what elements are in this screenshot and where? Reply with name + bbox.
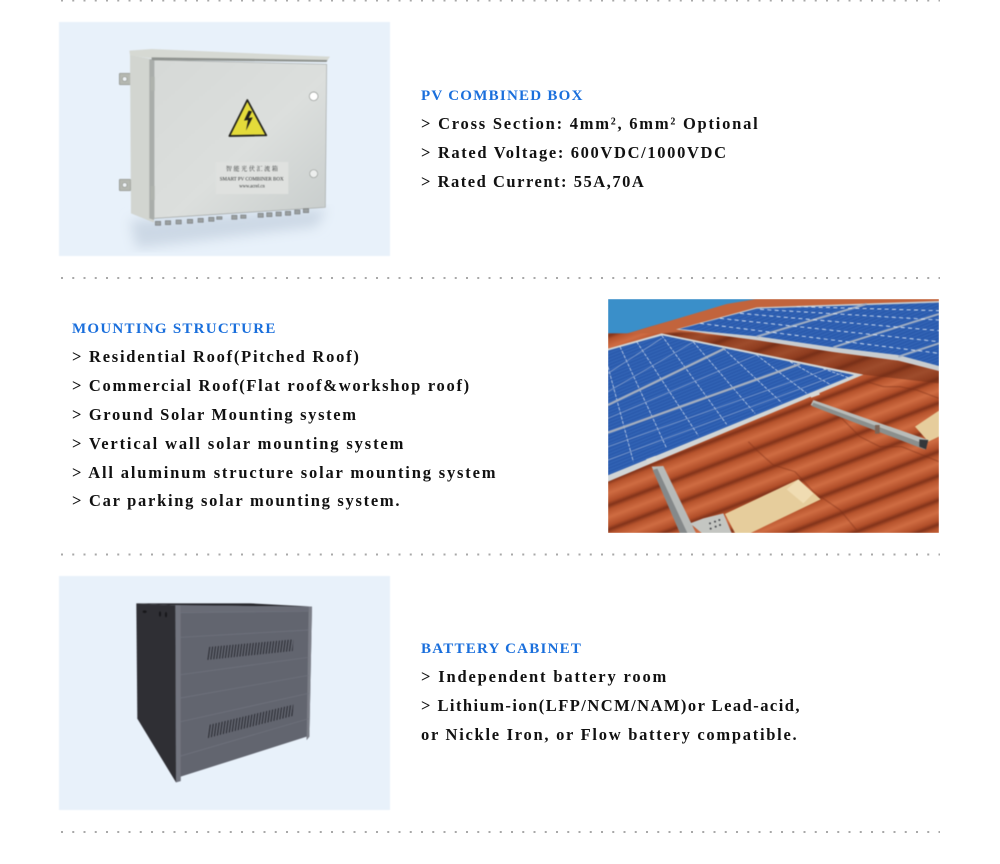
lower solar panel — [608, 332, 864, 482]
icon: mounting ears — [119, 73, 131, 191]
spec: rated voltage: > Rated Voltage: 600VDC/1000VDC — [421, 143, 728, 162]
tile joints — [748, 382, 939, 530]
item: residential roof: > Residential Roof(Pitched Roof) — [72, 347, 361, 366]
text block: battery cabinet — [421, 641, 801, 744]
side holes — [143, 610, 167, 617]
panel: battery cabinet photo — [59, 576, 390, 810]
wood battens — [725, 479, 821, 533]
label plate: www.acrel.cn — [239, 184, 265, 189]
mounting rail: left — [652, 466, 732, 533]
box door — [154, 60, 327, 218]
sky — [608, 299, 756, 334]
text block: mounting structure — [72, 321, 497, 510]
far roof — [630, 299, 939, 334]
box side — [130, 55, 154, 223]
roof tiles — [608, 333, 939, 533]
item: commercial roof: > Commercial Roof(Flat roof&workshop roof) — [72, 376, 471, 395]
reflection under box — [130, 208, 327, 248]
panel: solar panels on tiled roof photo — [608, 299, 939, 533]
heading: mounting structure: MOUNTING STRUCTURE — [72, 321, 277, 337]
panel: PV combiner box photo — [59, 22, 390, 256]
label plate — [216, 162, 288, 194]
label plate: 智能光伏汇流箱 — [226, 165, 280, 173]
text block: PV combined box — [421, 88, 759, 191]
cabinet side — [136, 603, 176, 782]
hinges — [151, 77, 155, 91]
feature: battery room: > Independent battery room — [421, 667, 668, 686]
item: aluminum structure: > All aluminum structure solar mounting system — [72, 463, 497, 482]
clamps — [646, 455, 656, 460]
icon: high-voltage warning triangle — [229, 100, 266, 136]
mounting rail: right — [811, 400, 928, 449]
item: vertical wall mounting: > Vertical wall solar mounting system — [72, 434, 405, 453]
heading: battery cabinet: BATTERY CABINET — [421, 641, 582, 657]
item: car parking: > Car parking solar mounting system. — [72, 491, 401, 510]
heading: PV combined box: PV COMBINED BOX — [421, 88, 584, 104]
upper solar panel — [676, 301, 939, 371]
spec: rated current: > Rated Current: 55A,70A — [421, 172, 645, 191]
label plate: SMART PV COMBINER BOX — [220, 177, 284, 182]
shadow under upper panel — [662, 332, 939, 383]
item: ground mounting: > Ground Solar Mounting system — [72, 405, 358, 424]
cabinet front — [175, 605, 312, 782]
vent: upper — [207, 639, 293, 660]
box lid — [129, 49, 330, 61]
icon: door locks — [309, 92, 318, 101]
cable glands — [155, 209, 309, 225]
feature: chemistry compatibility: > Lithium-ion(LFP/NCM/NAM)or Lead-acid, — [421, 696, 801, 715]
vent: lower — [207, 705, 293, 738]
panel seams — [181, 611, 309, 756]
cabinet top edge — [136, 603, 312, 607]
spec: cross section: > Cross Section: 4mm², 6mm² Optional — [421, 114, 759, 133]
feature: chemistry compatibility continued: or Nickle Iron, or Flow battery compatible. — [421, 725, 798, 744]
